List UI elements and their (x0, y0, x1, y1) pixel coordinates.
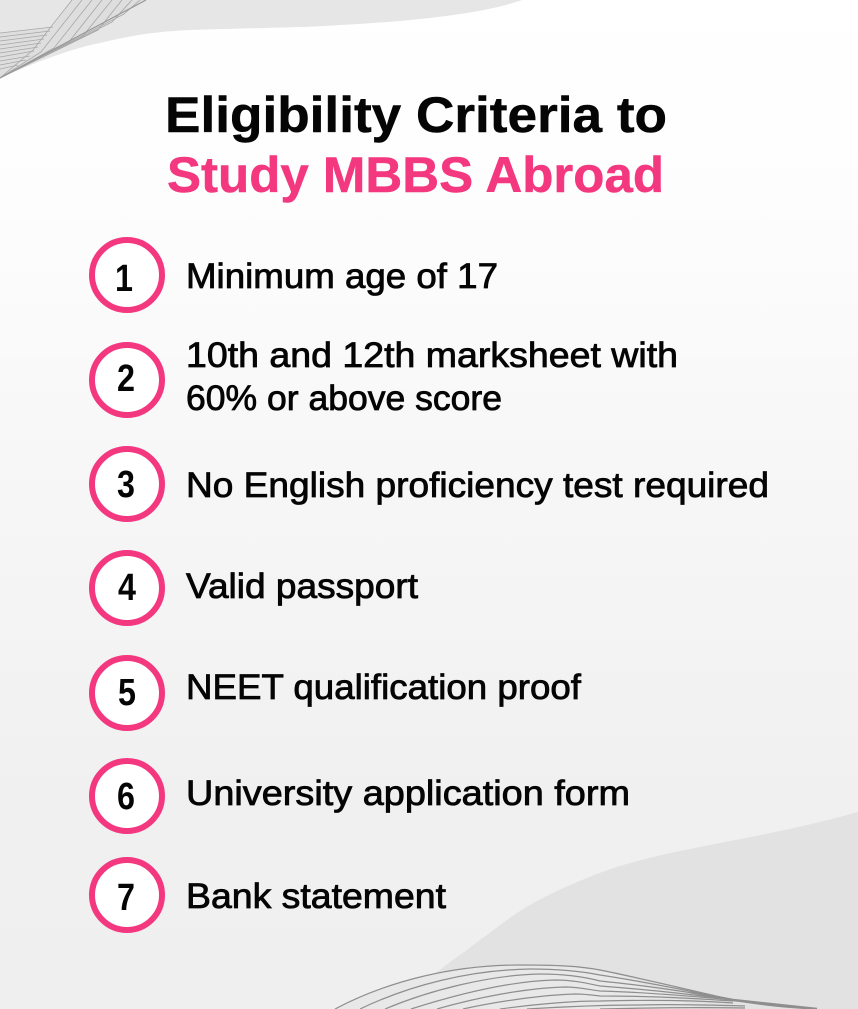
title (165, 87, 667, 203)
item 2: marksheet (92, 336, 678, 418)
item 2: marksheet: 10th and 12th marksheet with (186, 336, 678, 375)
item 4: passport: Valid passport (186, 567, 418, 606)
item 5: NEET proof (92, 658, 581, 728)
item 3: English test: 3 (117, 464, 135, 506)
item 2: marksheet: 60% or above score (186, 379, 502, 418)
item 1: minimum age: Minimum age of 17 (186, 257, 498, 296)
item 6: application form: 6 (117, 776, 135, 818)
item 4: passport (92, 553, 418, 623)
item 1: minimum age (92, 240, 498, 310)
item 5: NEET proof: 5 (118, 672, 136, 714)
item 3: English test (92, 449, 769, 519)
item 7: bank statement: Bank statement (186, 877, 446, 916)
title: Eligibility Criteria to (165, 87, 667, 143)
item 6: application form (92, 761, 630, 831)
bottom-right wave decoration (335, 812, 858, 1009)
item 2: marksheet: 2 (117, 358, 135, 400)
top-left wave decoration (0, 0, 522, 78)
title: Study MBBS Abroad (167, 147, 664, 203)
item 1: minimum age: 1 (115, 258, 133, 300)
item 6: application form: University application form (186, 774, 630, 813)
item 7: bank statement (92, 860, 446, 930)
item 3: English test: No English proficiency test required (186, 466, 769, 505)
item 7: bank statement: 7 (117, 877, 135, 919)
item 5: NEET proof: NEET qualification proof (186, 668, 581, 707)
item 4: passport: 4 (118, 567, 136, 609)
